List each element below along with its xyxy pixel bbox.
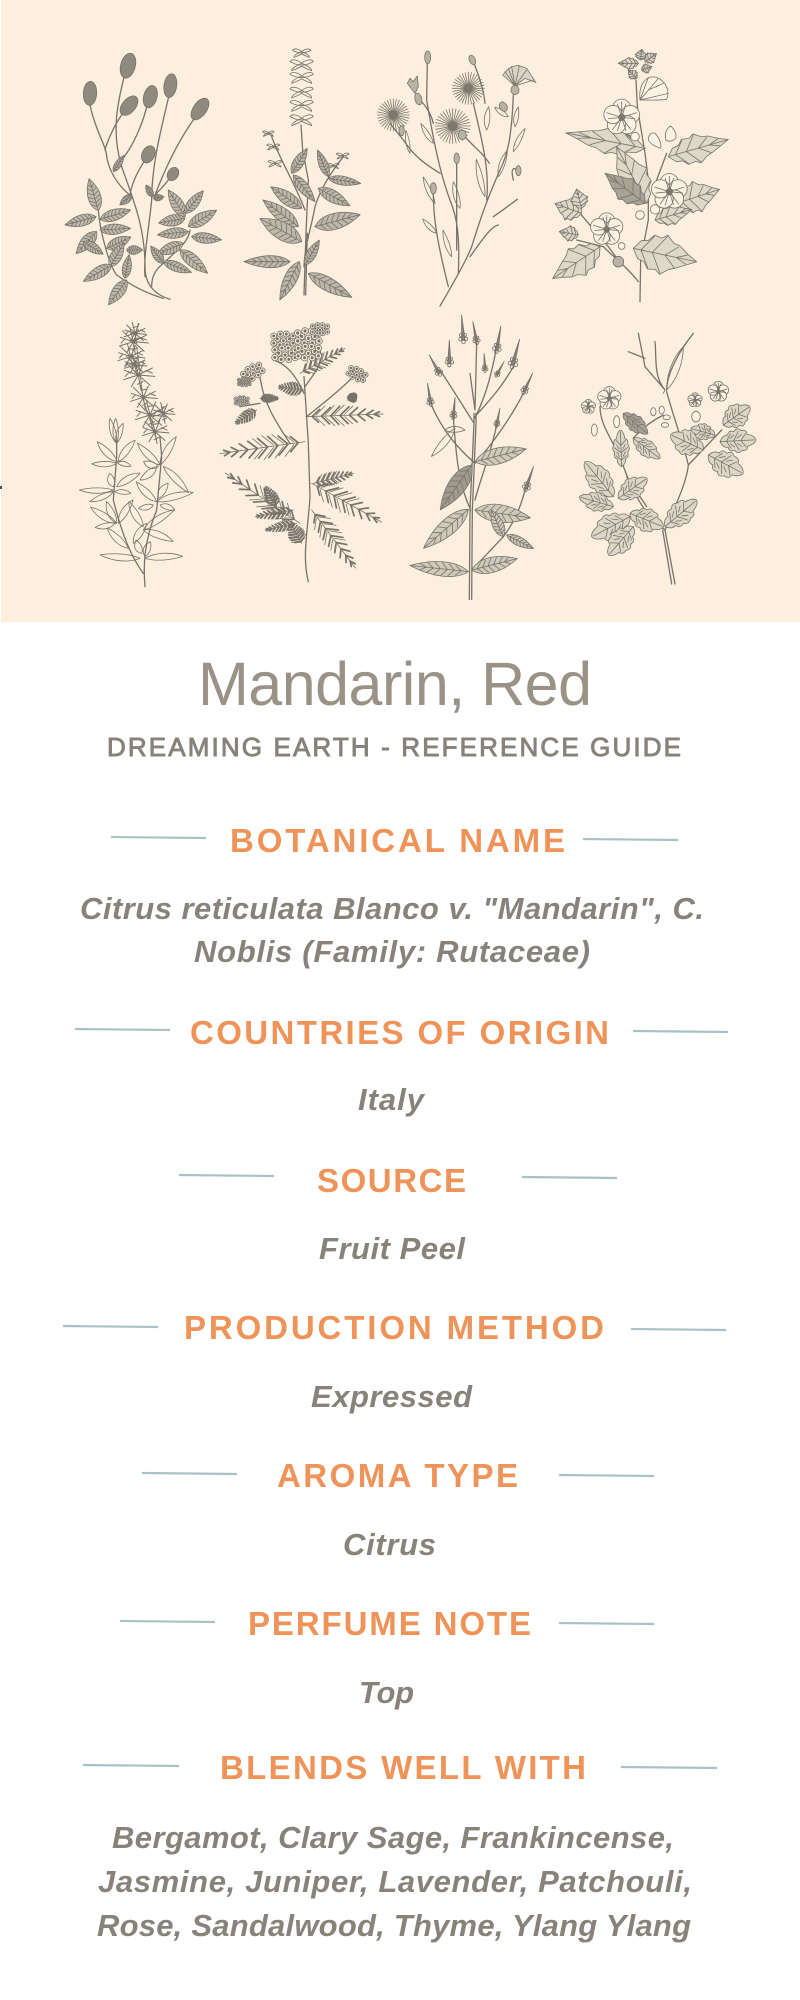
- plant illustration: burnet: [64, 52, 222, 308]
- section: botanical name: [80, 822, 704, 969]
- heading: AROMA TYPE: [277, 1457, 518, 1494]
- section: aroma type: [277, 1457, 518, 1562]
- heading: SOURCE: [317, 1162, 466, 1199]
- body text: Bergamot, Clary Sage, Frankincense,: [112, 1820, 674, 1855]
- heading: PRODUCTION METHOD: [184, 1309, 604, 1346]
- plant illustration: savory sprig: [79, 323, 194, 587]
- plant illustration: celandine: [576, 333, 757, 584]
- plant illustration: sage: [244, 49, 362, 303]
- body text: [80, 891, 704, 969]
- plant illustration: tansy: [218, 323, 387, 582]
- body text: Jasmine, Juniper, Lavender, Patchouli,: [98, 1864, 692, 1899]
- body text: Citrus: [343, 1527, 436, 1562]
- section: perfume note: [248, 1605, 531, 1710]
- body text: Citrus reticulata Blanco v. "Mandarin", C.: [80, 891, 704, 926]
- body text: [97, 1820, 692, 1943]
- plant illustration: cornflower: [375, 51, 536, 306]
- body text: Rose, Sandalwood, Thyme, Ylang Ylang: [97, 1908, 691, 1943]
- heading: BOTANICAL NAME: [230, 822, 565, 859]
- body text: Fruit Peel: [319, 1231, 466, 1266]
- section: blends well with: [97, 1749, 692, 1943]
- plant illustration: vervain: [409, 315, 537, 599]
- section: source: [317, 1162, 466, 1266]
- body text: Top: [359, 1675, 414, 1710]
- subtitle: DREAMING EARTH - REFERENCE GUIDE: [107, 732, 681, 762]
- body text: Italy: [358, 1082, 426, 1117]
- plant illustration: mallow: [544, 49, 732, 302]
- heading: PERFUME NOTE: [248, 1605, 531, 1642]
- section: production method: [184, 1309, 604, 1414]
- background panel: botanical illustrations: [0, 0, 800, 622]
- body text: Expressed: [311, 1379, 473, 1414]
- section: countries of origin: [190, 1014, 609, 1117]
- title: Mandarin, Red: [198, 650, 592, 718]
- heading: BLENDS WELL WITH: [220, 1749, 586, 1786]
- heading: COUNTRIES OF ORIGIN: [190, 1014, 609, 1051]
- body text: Noblis (Family: Rutaceae): [194, 934, 590, 969]
